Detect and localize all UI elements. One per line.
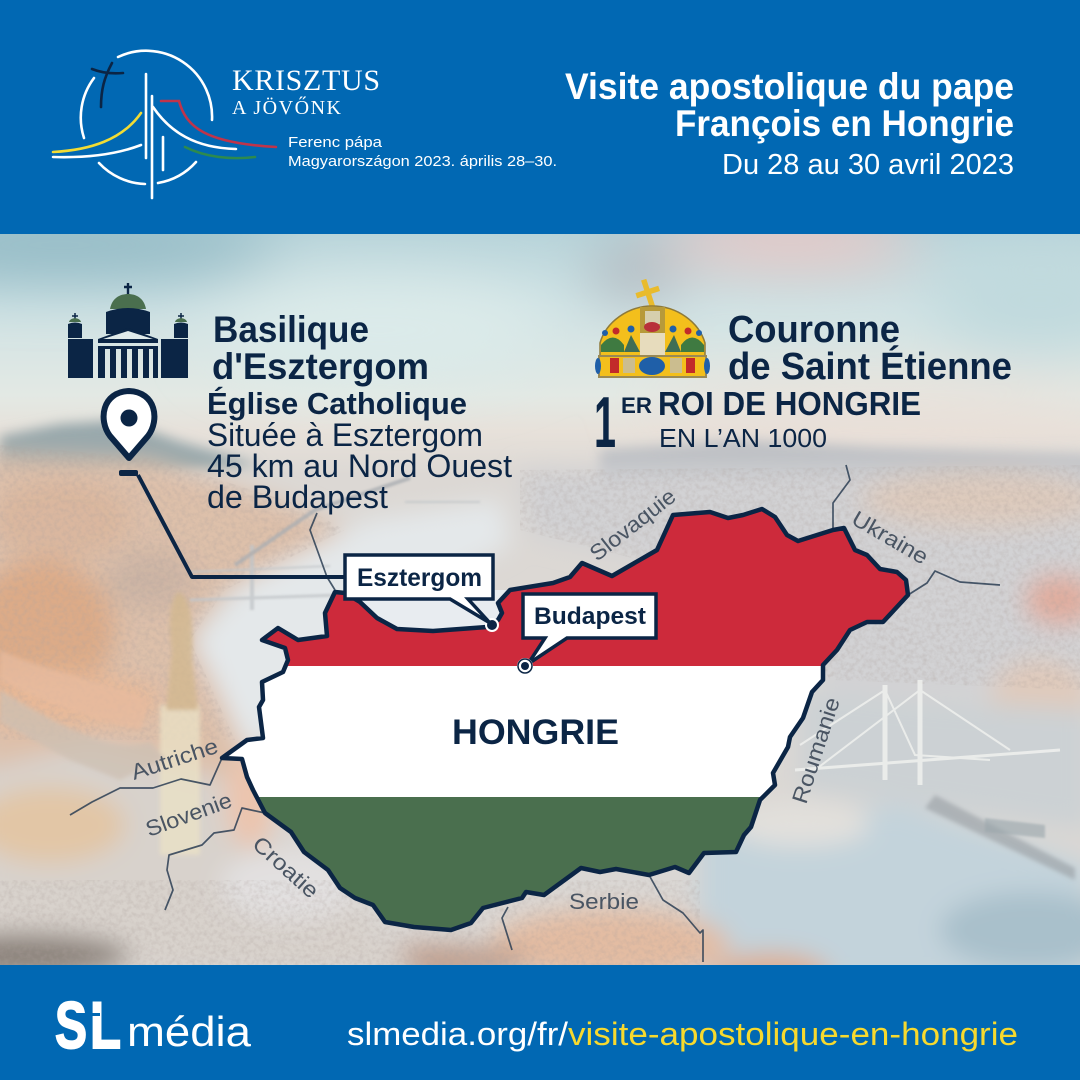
background photo of Budapest (0, 210, 1080, 997)
heading: Couronne de Saint Étienne: Couronne (728, 309, 900, 351)
right embankment and bridge zone (800, 690, 1080, 830)
title: François en Hongrie (675, 103, 1014, 144)
logo: Krisztus a jövőnk (53, 51, 557, 198)
subheading: 1er roi de Hongrie: 1 (594, 383, 616, 463)
website url (347, 1016, 1018, 1052)
subheading: Église Catholique (207, 386, 467, 421)
neighbouring country borders (70, 465, 1000, 962)
water (700, 805, 1080, 985)
river (195, 500, 510, 760)
logo: SL média: média (127, 1008, 252, 1055)
right city (520, 465, 1080, 700)
distant hills (0, 420, 1080, 490)
logo caption: Ferenc pápa (288, 134, 383, 151)
country labels: Ukraine (848, 506, 933, 569)
callout: Esztergom: Esztergom (357, 564, 482, 592)
bottom shore (490, 909, 730, 981)
website url: slmedia.org/fr/ (347, 1016, 568, 1052)
description: Située à Esztergom (207, 417, 483, 453)
callout: Budapest: Budapest (534, 603, 646, 630)
country labels: Serbie (569, 889, 639, 914)
country labels: Autriche (128, 733, 221, 785)
description: 45 km au Nord Ouest (207, 448, 512, 484)
description: de Budapest (207, 479, 388, 515)
icon: Holy Crown of Hungary (595, 276, 710, 377)
label: Hongrie: HONGRIE (452, 713, 619, 752)
text block: couronne (594, 309, 1012, 463)
website url: visite-apostolique-en-hongrie (568, 1016, 1018, 1052)
heading: Basilique d'Esztergom (212, 309, 429, 387)
header band (0, 0, 1080, 234)
logo: SL média: L (90, 988, 121, 1062)
callout: Budapest (517, 594, 656, 674)
logo: SL média: S (55, 988, 87, 1062)
leader line from pin to Esztergom (138, 475, 345, 577)
statue and monument details (0, 592, 200, 855)
icon: basilica (68, 283, 188, 378)
footer band (0, 965, 1080, 1080)
logo emblem (53, 51, 276, 198)
heading: Basilique d'Esztergom: Basilique (213, 309, 369, 350)
callout: Esztergom (345, 555, 499, 632)
subheading: 1er roi de Hongrie: ER (621, 393, 652, 418)
date line: EN L’AN 1000 (659, 423, 827, 453)
subheading: 1er roi de Hongrie (594, 383, 921, 463)
country labels (128, 483, 933, 914)
country labels: Roumanie (787, 694, 845, 807)
heading: Basilique d'Esztergom: d'Esztergom (212, 346, 429, 387)
map of Hungary with flag colours (200, 500, 940, 937)
logo wordmark: KRISZTUS (232, 64, 380, 97)
Chain bridge in distance (190, 478, 480, 610)
heading: Couronne de Saint Étienne (728, 309, 1012, 388)
title: Du 28 au 30 avril 2023 (722, 149, 1014, 181)
title: Visite apostolique du pape (565, 66, 1014, 107)
city texture (0, 440, 1080, 966)
title (565, 66, 1014, 181)
Elisabeth bridge (795, 680, 1060, 785)
left city (0, 455, 345, 800)
lake notch below Esztergom (372, 590, 507, 629)
text block: basilique (207, 309, 512, 515)
description (207, 417, 512, 515)
subheading: 1er roi de Hongrie: ROI DE HONGRIE (658, 385, 921, 422)
bottom left monument (0, 745, 420, 975)
heading: Couronne de Saint Étienne: de Saint Étienne (728, 344, 1012, 388)
icon: location pin (104, 391, 154, 476)
logo: Krisztus a jövőnk: A JÖVŐNK (232, 95, 342, 119)
logo: SL média (55, 988, 252, 1062)
logo: Krisztus a jövőnk: Magyarországon 2023. április 28–30. (288, 153, 557, 170)
country labels: Slovaquie (585, 483, 680, 566)
country labels: Slovenie (142, 787, 235, 842)
country labels: Croatie (248, 831, 324, 903)
